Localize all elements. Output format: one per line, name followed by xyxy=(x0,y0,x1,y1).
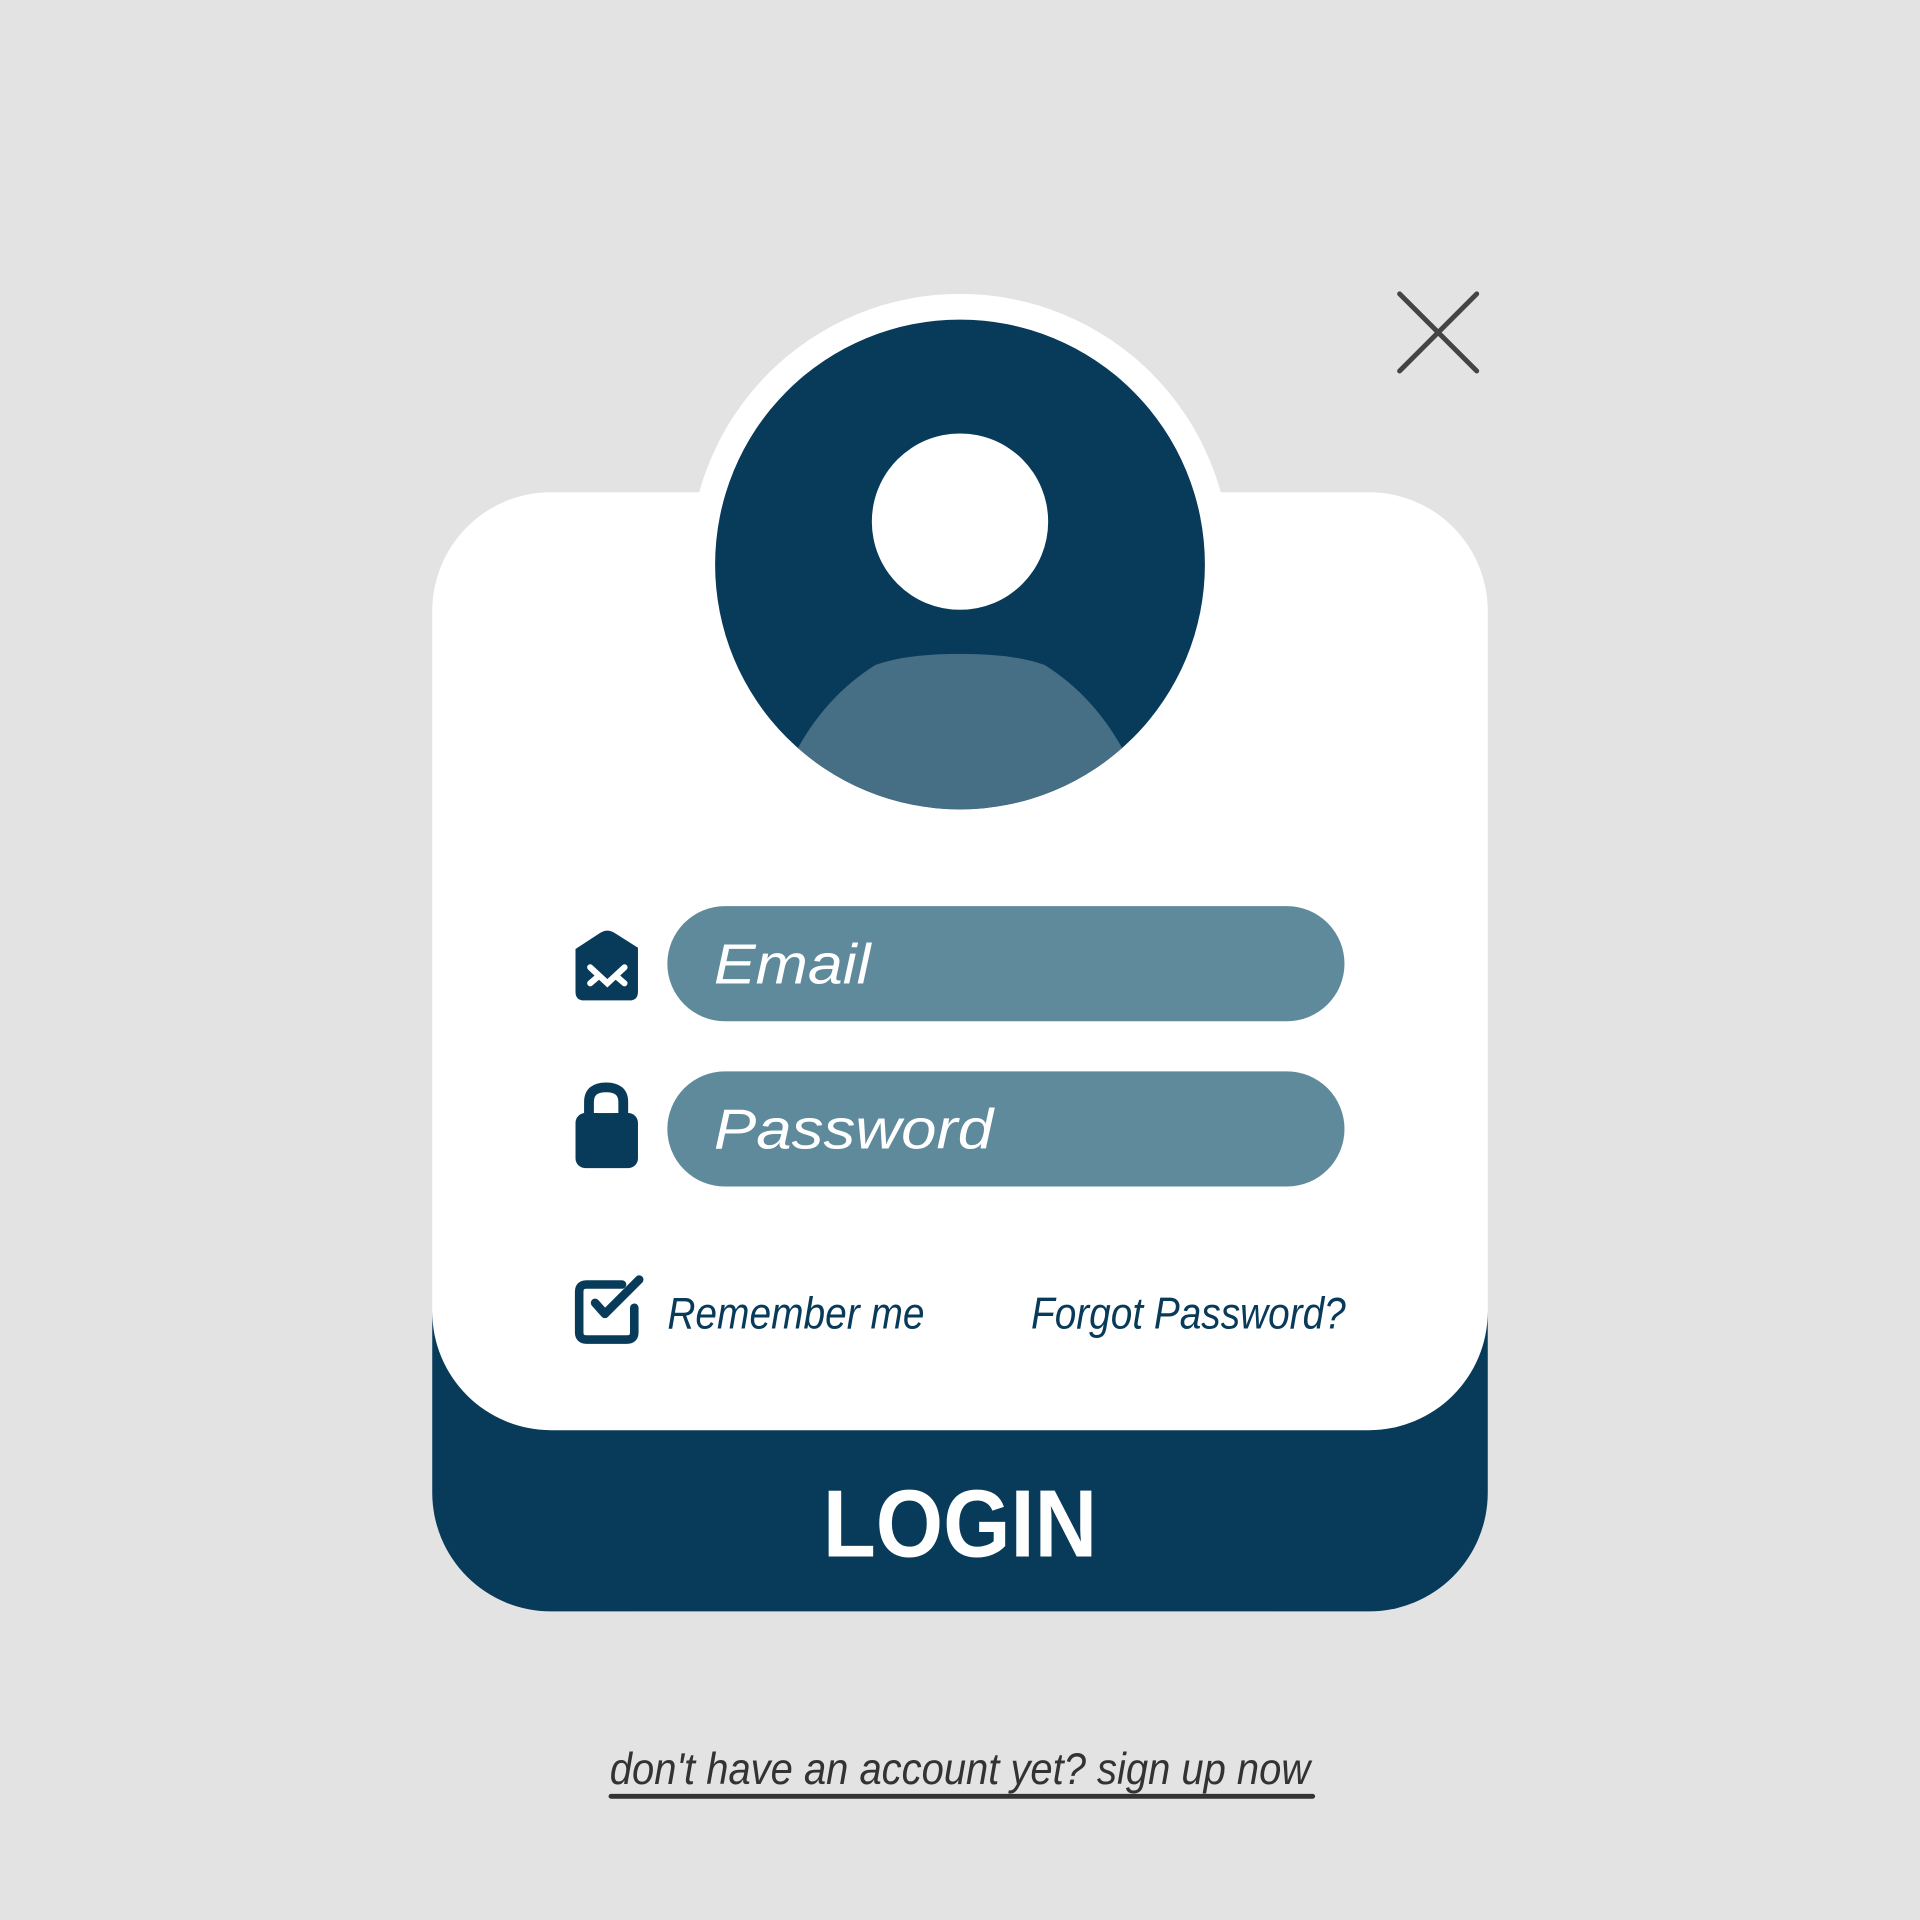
forgot password: Forgot Password? xyxy=(1031,1290,1346,1339)
icon: email xyxy=(576,931,638,1000)
icon: close X xyxy=(1400,294,1477,371)
login button base xyxy=(432,1200,1488,1611)
panel: login card xyxy=(432,294,1488,1611)
email field xyxy=(667,906,1344,1021)
icon: lock xyxy=(576,1087,638,1168)
icon: checkbox xyxy=(579,1280,639,1340)
avatar xyxy=(689,294,1231,835)
login label: LOGIN xyxy=(823,1471,1097,1577)
remember me: Remember me xyxy=(667,1290,924,1339)
password field xyxy=(667,1071,1344,1187)
white card xyxy=(432,492,1488,1430)
email field: Email xyxy=(714,932,872,995)
signup link: don't have an account yet? sign up now xyxy=(610,1745,1313,1794)
password field: Password xyxy=(714,1098,995,1161)
